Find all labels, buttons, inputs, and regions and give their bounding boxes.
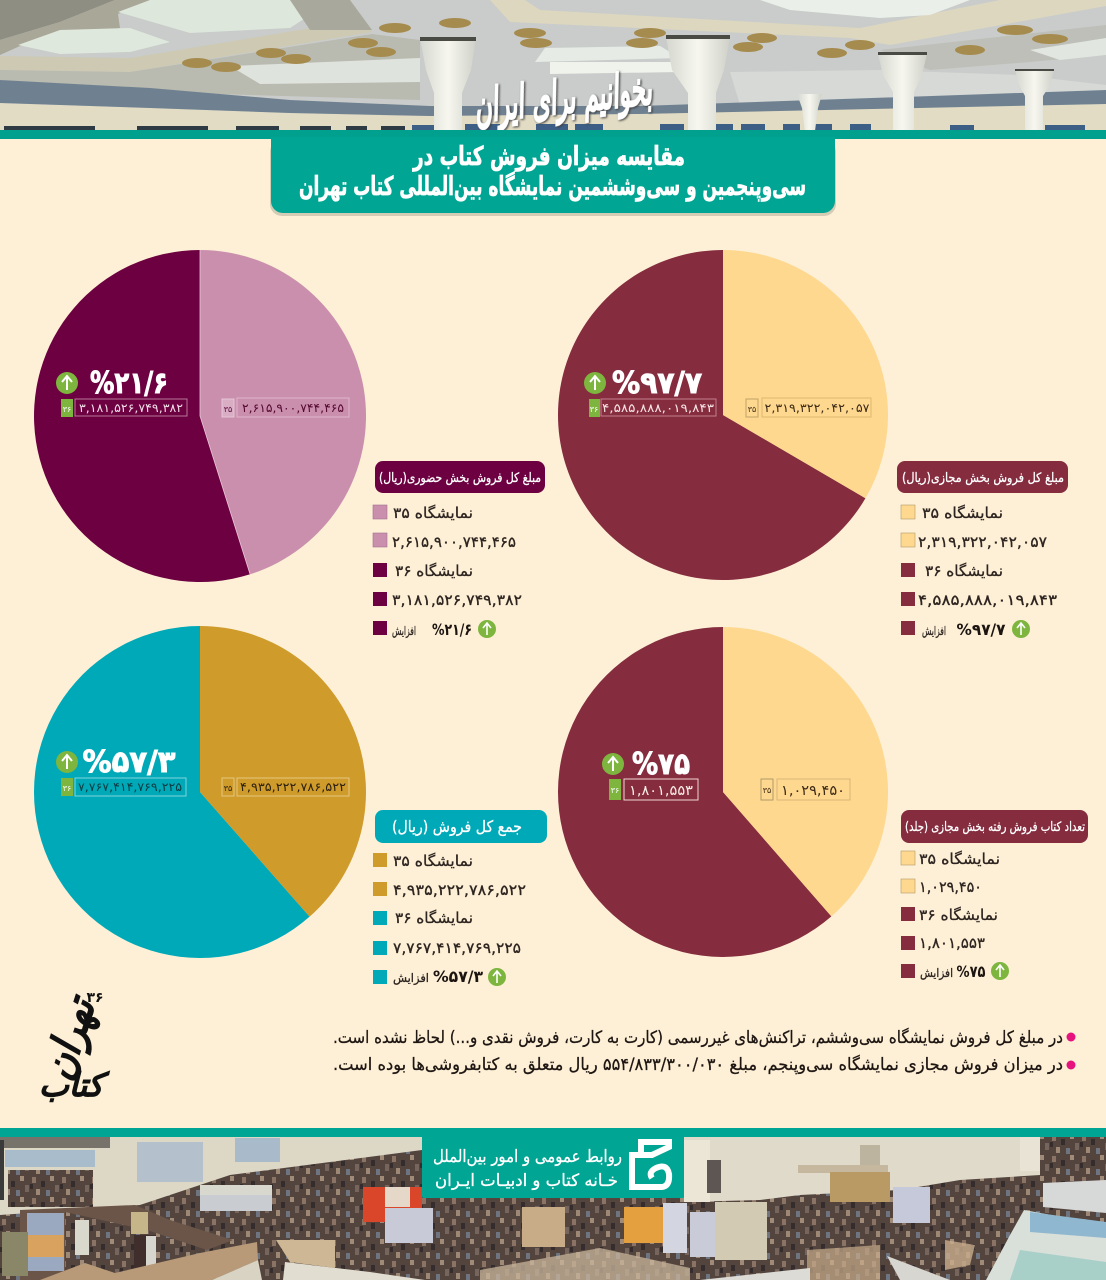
footer label (422, 1133, 684, 1198)
value 36 (624, 779, 698, 800)
year badge 36 (61, 399, 73, 417)
year badge 35 (222, 778, 234, 796)
year badge 35 (746, 399, 758, 417)
label text line 2: خـانه کتاب و ادبیـات ایـران (435, 1171, 618, 1191)
value 35: ۲,۶۱۵,۹۰۰,۷۴۴,۴۶۵ (242, 401, 344, 415)
percentage: %۷۵ (632, 747, 690, 782)
year badge 35: ۳۵ (748, 405, 756, 414)
pie chart: books sold online (558, 627, 888, 957)
legend: total sales: نمایشگاه ۳۵ (393, 852, 473, 870)
legend: online sales: ۲,۳۱۹,۳۲۲,۰۴۲,۰۵۷ (918, 533, 1047, 551)
value 35: ۱,۰۲۹,۴۵۰ (781, 783, 845, 799)
year badge 36: ۳۶ (590, 405, 598, 414)
label text line 1: روابط عمومی و امور بین‌الملل (433, 1147, 622, 1167)
notes (333, 1027, 1076, 1075)
icon: book house logo (632, 1142, 669, 1187)
pie chart: total sales (34, 626, 366, 958)
year badge 35: ۳۵ (224, 405, 232, 414)
header photo: ceiling and columns (0, 0, 1106, 131)
header calligraphy logo: بخوانیم برای ایران (471, 61, 655, 134)
legend: books sold online (901, 810, 1088, 981)
title line 1: مقایسه میزان فروش کتاب در (412, 142, 685, 172)
legend: total sales: ۷,۷۶۷,۴۱۴,۷۶۹,۲۲۵ (393, 939, 521, 957)
footer photo: book fair crowd (0, 1137, 1106, 1280)
year badge 36: ۳۶ (611, 786, 619, 795)
legend: total sales: نمایشگاه ۳۶ (395, 909, 473, 927)
calligraphy logo: Tehran book fair 36: تهران (33, 988, 107, 1085)
legend heading (375, 461, 545, 493)
pie chart: online sales (558, 250, 888, 580)
legend: online sales (897, 461, 1068, 639)
legend: online sales: نمایشگاه ۳۵ (922, 504, 1003, 522)
percentage: %۲۱/۶ (90, 366, 168, 401)
value 36: ۱,۸۰۱,۵۵۳ (629, 783, 693, 799)
legend: books sold online: افزایش (920, 966, 953, 981)
value 35 (777, 779, 850, 800)
value 36 (75, 778, 186, 796)
top teal band (0, 130, 1106, 139)
year badge 36 (609, 779, 621, 800)
year badge 35 (222, 399, 234, 417)
icon: up arrow (584, 372, 606, 394)
legend: books sold online: %۷۵ (956, 962, 986, 981)
calligraphy logo: Tehran book fair 36: کتاب (39, 1066, 111, 1104)
legend: in-person sales (373, 461, 545, 639)
year badge 36: ۳۶ (63, 784, 71, 793)
legend: in-person sales: ۳,۱۸۱,۵۲۶,۷۴۹,۳۸۲ (392, 591, 522, 609)
title panel (270, 137, 836, 216)
icon: up arrow (56, 372, 78, 394)
legend: books sold online: ۱,۸۰۱,۵۵۳ (919, 934, 985, 952)
value 35 (237, 778, 349, 796)
legend heading (897, 461, 1068, 493)
pie chart: in-person sales (34, 250, 366, 582)
legend: total sales: افزایش (393, 971, 429, 986)
percentage: %۹۷/۷ (612, 366, 702, 401)
note 2: در میزان فروش مجازی نمایشگاه سی‌وپنجم، مبلغ ۵۵۴/۸۳۳/۳۰۰/۰۳۰ ریال متعلق به کتابفروشی‌ها بوده است. (333, 1054, 1063, 1075)
legend heading (901, 810, 1088, 843)
value 35 (762, 398, 871, 417)
legend: total sales: ۴,۹۳۵,۲۲۲,۷۸۶,۵۲۲ (393, 881, 526, 899)
year badge 36: ۳۶ (63, 405, 71, 414)
legend heading: جمع کل فروش (ریال) (392, 817, 522, 837)
legend: total sales: %۵۷/۳ (433, 967, 483, 986)
value 36: ۴,۵۸۵,۸۸۸,۰۱۹,۸۴۳ (602, 401, 715, 415)
legend: in-person sales: نمایشگاه ۳۶ (395, 562, 473, 580)
percentage: %۵۷/۳ (82, 745, 176, 780)
calligraphy logo: Tehran book fair 36: ۳۶ (86, 990, 104, 1006)
legend heading (375, 810, 547, 843)
value 36: ۳,۱۸۱,۵۲۶,۷۴۹,۳۸۲ (79, 401, 183, 415)
legend: in-person sales: افزایش (392, 624, 416, 639)
year badge 35: ۳۵ (763, 786, 771, 795)
year badge 35: ۳۵ (224, 784, 232, 793)
legend: total sales (373, 810, 547, 986)
legend: in-person sales: %۲۱/۶ (432, 620, 472, 639)
legend: in-person sales: ۲,۶۱۵,۹۰۰,۷۴۴,۴۶۵ (392, 533, 516, 551)
year badge 35 (761, 779, 773, 800)
legend: online sales: ۴,۵۸۵,۸۸۸,۰۱۹,۸۴۳ (918, 591, 1057, 609)
legend: books sold online: نمایشگاه ۳۵ (919, 850, 1000, 868)
legend: online sales: %۹۷/۷ (956, 620, 1006, 639)
value 35: ۴,۹۳۵,۲۲۲,۷۸۶,۵۲۲ (240, 780, 346, 794)
year badge 36 (61, 778, 73, 796)
icon: up arrow (56, 751, 78, 773)
value 35 (237, 398, 349, 417)
legend: online sales: نمایشگاه ۳۶ (925, 562, 1003, 580)
value 36: ۷,۷۶۷,۴۱۴,۷۶۹,۲۲۵ (78, 780, 182, 794)
legend: books sold online: نمایشگاه ۳۶ (919, 906, 998, 924)
legend heading: مبلغ کل فروش بخش حضوری(ریال) (379, 471, 541, 486)
legend: online sales: افزایش (922, 624, 946, 639)
legend heading: مبلغ کل فروش بخش مجازی(ریال) (902, 471, 1064, 486)
bottom teal band (0, 1128, 1106, 1137)
icon: up arrow (602, 753, 624, 775)
legend: in-person sales: نمایشگاه ۳۵ (393, 504, 473, 522)
value 35: ۲,۳۱۹,۳۲۲,۰۴۲,۰۵۷ (764, 401, 870, 415)
legend: books sold online: ۱,۰۲۹,۴۵۰ (919, 878, 982, 896)
title line 2: سی‌وپنجمین و سی‌وششمین نمایشگاه بین‌المللی کتاب تهران (299, 171, 806, 202)
year badge 36 (589, 399, 600, 417)
